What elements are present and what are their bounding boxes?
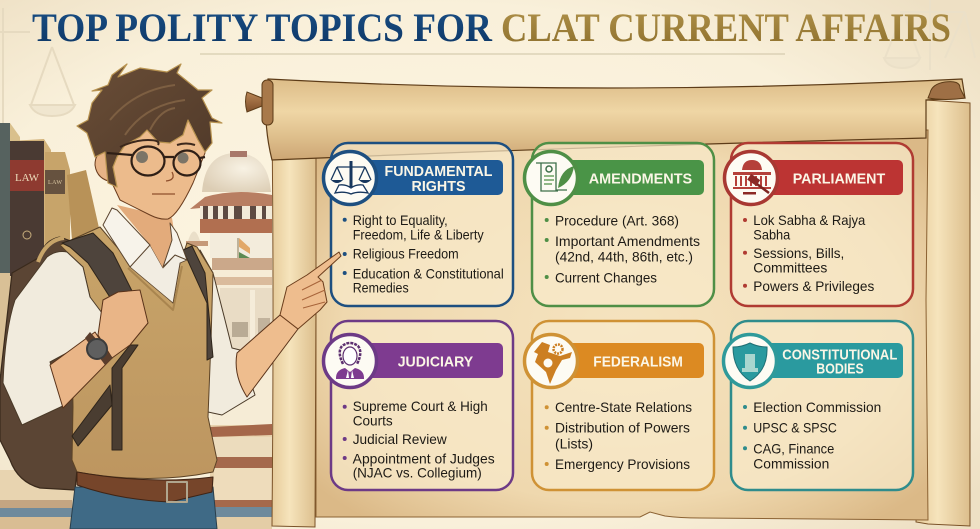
- heading: amendments: [551, 160, 704, 195]
- panel frame: [731, 321, 913, 490]
- bullet list: [343, 213, 504, 296]
- heading: fundamental rights: [350, 160, 503, 195]
- bullet list: Lok Sabha & Rajya: [753, 213, 866, 228]
- bullet list: Procedure (Art. 368): [555, 214, 679, 229]
- title: [32, 7, 951, 50]
- title: CLAT CURRENT AFFAIRS: [501, 7, 951, 50]
- panel: constitutional bodies: [724, 321, 913, 490]
- shirt chest: [130, 245, 187, 303]
- icon: scales and book: [324, 152, 376, 204]
- student character: [0, 64, 341, 529]
- bullet list: Sabha: [753, 227, 791, 242]
- heading: judiciary: [350, 343, 503, 378]
- panel: judiciary: [324, 321, 513, 490]
- scroll knob left: [246, 80, 273, 125]
- vest neckline trim: [128, 266, 182, 310]
- pointing hand: [280, 252, 341, 329]
- right sleeve: [200, 250, 255, 415]
- bullet list: Education & Constitutional: [353, 266, 504, 281]
- panel: parliament: [724, 143, 913, 306]
- bullet list: [545, 400, 692, 472]
- bullet list: Appointment of Judges: [353, 451, 495, 466]
- scroll curl right: [928, 82, 965, 100]
- nose and mouth: [152, 172, 175, 194]
- books behind student, upper left: [0, 123, 99, 373]
- bullet list: Election Commission: [753, 400, 881, 415]
- bullet list: Freedom, Life & Liberty: [353, 227, 484, 242]
- heading: federalism: [551, 343, 704, 378]
- bullet list: Committees: [753, 260, 827, 275]
- bullet list: Emergency Provisions: [555, 457, 690, 472]
- heading: fundamental rights: RIGHTS: [412, 178, 466, 195]
- bullet list: Right to Equality,: [353, 213, 448, 228]
- bullet list: Courts: [353, 414, 393, 429]
- bullet list: Current Changes: [555, 270, 657, 285]
- book stack left of student: [0, 470, 75, 529]
- parchment scroll: [246, 79, 970, 527]
- bullet list: (42nd, 44th, 86th, etc.): [555, 250, 693, 265]
- backpack: [0, 237, 95, 490]
- icon: judge: [324, 334, 376, 388]
- heading: parliament: PARLIAMENT: [793, 170, 885, 187]
- panel frame: [532, 321, 714, 490]
- left strap: [62, 233, 133, 302]
- left hand: [98, 290, 148, 358]
- left sleeve: [3, 252, 102, 425]
- panel frame: [532, 143, 714, 306]
- scroll main sheet: [316, 130, 928, 520]
- bullet list: Judicial Review: [353, 432, 447, 447]
- panel: fundamental rights: [324, 143, 513, 306]
- bullet list: [343, 399, 495, 481]
- bullet list: Centre-State Relations: [555, 400, 692, 415]
- scroll left strip: [272, 125, 316, 527]
- panel: amendments: [524, 143, 714, 306]
- bullet list: (NJAC vs. Collegium): [353, 466, 482, 481]
- heading: constitutional bodies: CONSTITUTIONAL: [782, 346, 897, 363]
- bullet list: Distribution of Powers: [555, 421, 690, 436]
- bullet list: Important Amendments: [555, 234, 700, 249]
- lower strap: [72, 345, 138, 450]
- shirt collar: [103, 208, 187, 267]
- books behind student, upper left: LAW: [15, 172, 40, 184]
- trousers: [70, 487, 217, 529]
- watermark: scales left: [0, 8, 75, 125]
- hair: [77, 64, 222, 187]
- bullet list: Remedies: [353, 281, 409, 296]
- scroll top roll: [266, 79, 965, 160]
- bullet list: CAG, Finance: [753, 442, 835, 457]
- supreme court building: [186, 151, 272, 427]
- panel frame: [731, 143, 913, 306]
- neck: [117, 205, 177, 268]
- bullet list: [743, 213, 874, 294]
- bullet list: Supreme Court & High: [353, 399, 488, 414]
- book stack right of student: [210, 424, 272, 529]
- icon: scroll and quill: [524, 152, 578, 204]
- bullet list: UPSC & SPSC: [753, 420, 837, 435]
- title: TOP POLITY TOPICS FOR: [32, 7, 493, 50]
- glasses: [107, 146, 205, 176]
- books behind student, upper left: LAW: [48, 180, 62, 186]
- bullet list: Sessions, Bills,: [753, 246, 844, 261]
- eyes: [120, 140, 195, 164]
- backpack padding: [38, 238, 64, 262]
- bullet list: (Lists): [555, 436, 593, 451]
- left forearm: [50, 332, 112, 408]
- sweater vest: [60, 227, 217, 478]
- heading: fundamental rights: FUNDAMENTAL: [384, 163, 492, 180]
- heading: parliament: [751, 160, 903, 195]
- right strap: [183, 246, 213, 360]
- heading: constitutional bodies: [751, 343, 903, 378]
- heading: judiciary: JUDICIARY: [398, 354, 473, 371]
- heading: amendments: AMENDMENTS: [589, 170, 692, 187]
- right forearm: [236, 315, 298, 397]
- panel frame: [331, 143, 513, 306]
- bullet list: Powers & Privileges: [753, 279, 874, 294]
- bullet list: Commission: [753, 456, 829, 471]
- panel frame: [331, 321, 513, 490]
- ear: [95, 152, 113, 182]
- icon: parliament and gavel: [724, 152, 778, 204]
- watch: [85, 332, 113, 365]
- bullet list: [545, 214, 700, 285]
- belt: [77, 472, 213, 502]
- icon: shield emblem: [724, 334, 776, 388]
- watermark: scales right: [884, 0, 975, 70]
- scroll right strip: [916, 100, 970, 526]
- bullet list: Religious Freedom: [353, 247, 459, 262]
- heading: constitutional bodies: BODIES: [816, 361, 864, 378]
- face: [105, 95, 205, 219]
- bullet list: [743, 400, 881, 471]
- heading: federalism: FEDERALISM: [593, 354, 683, 371]
- panel: federalism: [524, 321, 714, 490]
- icon: india map and gears: [524, 334, 578, 388]
